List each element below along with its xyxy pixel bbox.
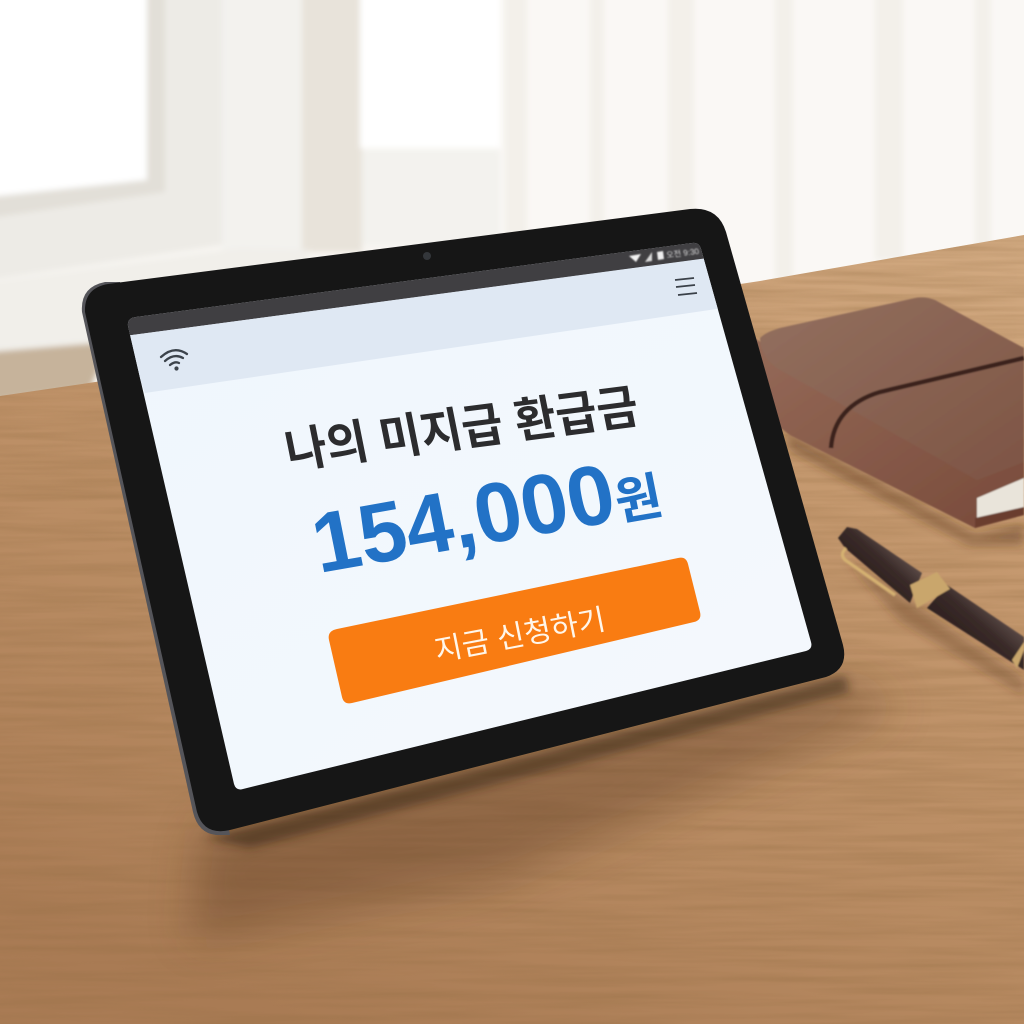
icon: menu: [675, 278, 697, 295]
tablet side edge: [82, 282, 230, 835]
wooden desk: [0, 235, 1024, 1024]
notebook: [750, 297, 1024, 545]
window sill: [0, 248, 310, 370]
button: [329, 558, 700, 703]
background: bright window and curtain: [0, 0, 1024, 402]
status icons: 오전 9:30: [665, 246, 700, 260]
window inner frame: [0, 0, 165, 218]
camera: [423, 252, 431, 260]
shadow beneath tablet: [190, 680, 900, 940]
pen shadow: [845, 558, 1024, 695]
status bar: [120, 240, 710, 336]
window pane left: [0, 0, 147, 197]
tablet: [82, 209, 844, 835]
pen clip: [842, 548, 895, 595]
status icons: [629, 246, 700, 262]
title: 나의 미지급 환급금: [281, 381, 643, 479]
wall between windows: [222, 0, 302, 260]
window column: [302, 0, 362, 252]
tablet body: [85, 209, 844, 831]
notebook shadow: [785, 430, 1024, 545]
notebook spine face: [750, 335, 1024, 528]
button label: 지금 신청하기: [432, 603, 608, 668]
pen end ring: [1012, 642, 1024, 668]
curtain folds: [505, 0, 991, 280]
notebook strap: [831, 358, 1024, 448]
notebook back edge: [975, 507, 1024, 528]
amount: 154,000원: [304, 438, 669, 591]
pen: [838, 527, 1024, 695]
app header band: [125, 258, 730, 393]
contact shadow: [205, 675, 850, 848]
tablet screen: [128, 242, 812, 790]
window frame: [0, 0, 222, 280]
icon: wifi: [161, 350, 187, 370]
pen gold ring: [910, 572, 950, 608]
pen cap: [838, 527, 922, 603]
window pane centre: [360, 0, 502, 148]
pen barrel: [927, 585, 1024, 670]
notebook cover: [760, 297, 1024, 480]
lower pane centre: [362, 150, 502, 245]
notebook pages: [977, 478, 1024, 518]
tan strip under sill: [0, 342, 110, 402]
curtain: [500, 0, 1024, 290]
